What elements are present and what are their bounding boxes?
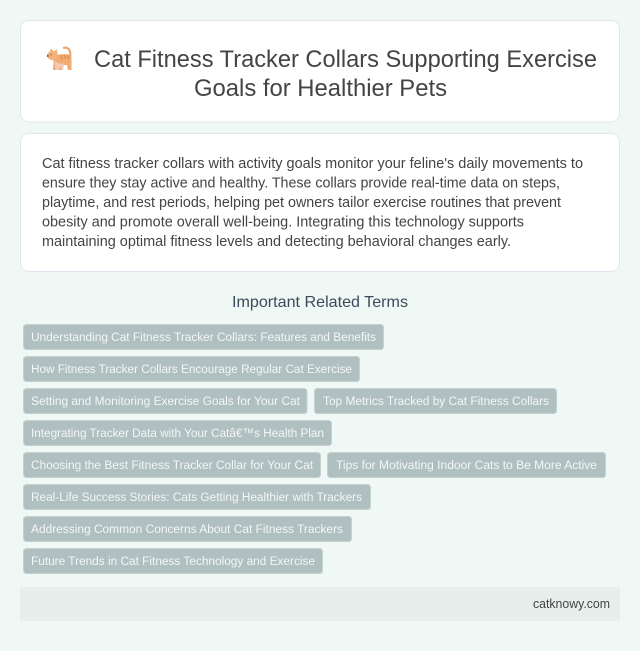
- panel: description card: [20, 134, 620, 272]
- description text: Cat fitness tracker collars with activity goals monitor your feline's daily movements to: [42, 156, 583, 172]
- chip: health plan: Integrating Tracker Data with Your Catâ€™s Health Plan: [31, 426, 324, 440]
- title text: [94, 46, 597, 102]
- chip: choosing collar: [24, 452, 320, 478]
- title text: Goals for Healthier Pets: [194, 75, 447, 102]
- panel: title card: [20, 20, 620, 122]
- chip: choosing collar: Choosing the Best Fitness Tracker Collar for Your Cat: [31, 458, 314, 472]
- description text: playtime, and rest periods, helping pet owners tailor exercise routines that prevent: [42, 195, 561, 211]
- chip: understanding collars: Understanding Cat Fitness Tracker Collars: Features and Benefits: [31, 330, 376, 344]
- description text: ensure they stay active and healthy. These collars provide real-time data on steps,: [42, 176, 560, 192]
- chip: encourage exercise: How Fitness Tracker Collars Encourage Regular Cat Exercise: [31, 362, 352, 376]
- chip: common concerns: [24, 516, 352, 542]
- chip: future trends: Future Trends in Cat Fitness Technology and Exercise: [31, 554, 315, 568]
- chip: indoor cats: [328, 452, 606, 478]
- chip: top metrics: [314, 388, 556, 414]
- chip: success stories: [24, 484, 370, 510]
- chip: encourage exercise: [24, 356, 360, 382]
- chip: future trends: [24, 548, 322, 574]
- chip: common concerns: Addressing Common Concerns About Cat Fitness Trackers: [31, 522, 343, 536]
- chip: success stories: Real-Life Success Stories: Cats Getting Healthier with Trackers: [31, 490, 362, 504]
- chip: setting goals: [24, 388, 307, 414]
- chip: health plan: [24, 420, 332, 446]
- related terms chips: [24, 324, 606, 574]
- heading: important related terms: Important Related Terms: [232, 294, 408, 311]
- description text: [42, 156, 583, 250]
- footer bar: [20, 587, 620, 621]
- chip: understanding collars: [24, 324, 384, 350]
- chip: setting goals: Setting and Monitoring Exercise Goals for Your Cat: [31, 394, 301, 408]
- footer site name: catknowy.com: [533, 597, 610, 611]
- chip: indoor cats: Tips for Motivating Indoor Cats to Be More Active: [336, 458, 597, 472]
- description text: obesity and promote overall well-being. Integrating this technology supports: [42, 214, 524, 230]
- icon: cat: [47, 48, 72, 70]
- chip: top metrics: Top Metrics Tracked by Cat Fitness Collars: [323, 394, 549, 408]
- title text: Cat Fitness Tracker Collars Supporting Exercise: [94, 46, 597, 73]
- description text: maintaining optimal fitness levels and detecting behavioral changes early.: [42, 234, 511, 250]
